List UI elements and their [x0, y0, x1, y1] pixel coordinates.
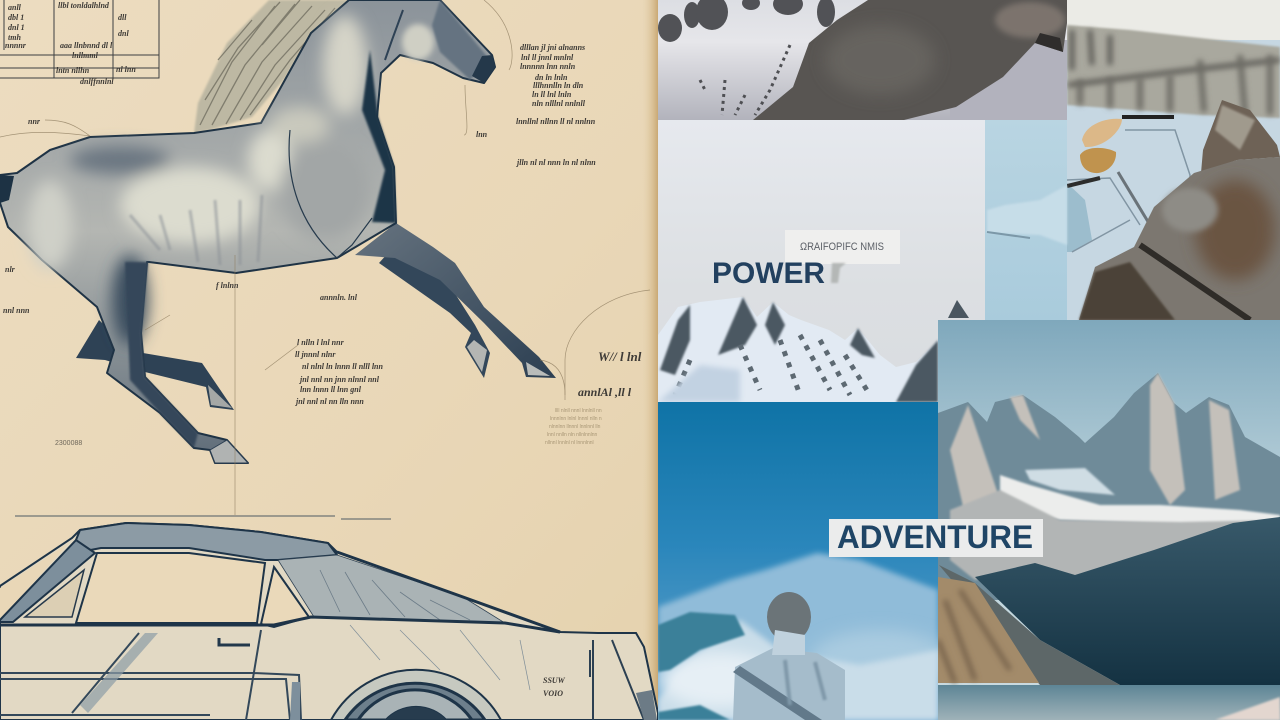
- annotations: handwritten notes: nnl nnn: [3, 306, 30, 315]
- car belt line: [0, 617, 560, 632]
- annotations: handwritten notes: dlllan jl jni alnanns: [520, 43, 585, 52]
- car A pillar: [0, 540, 95, 622]
- gray scree: [950, 490, 1280, 580]
- rock speckle: [675, 335, 870, 395]
- table: anatomical data grid: lnllmml: [72, 51, 99, 60]
- clouds: [658, 553, 938, 720]
- dark rock faces: [660, 297, 938, 402]
- table: anatomical data grid: [0, 0, 159, 86]
- lit rock faces: [950, 373, 1240, 515]
- illustration: car blueprint: SSUW: [543, 676, 566, 685]
- car small front window: [25, 570, 84, 617]
- horse body: [0, 0, 495, 463]
- annotations: handwritten notes: jnl nnl nl nn lln nnn: [294, 397, 364, 406]
- panel: blueprint sketch page: [0, 0, 658, 720]
- annotations: handwritten notes: lnnllnl nllnn ll nl nnlnn: [516, 117, 596, 126]
- horse far fore hoof: [467, 340, 487, 372]
- table: anatomical data grid: nnnnr: [5, 41, 27, 50]
- horse hind hoof: [210, 440, 248, 463]
- horse mane: [194, 0, 349, 133]
- annotations: handwritten notes: nln nlllnl nnlnll: [532, 99, 586, 108]
- car door and trim: [0, 630, 301, 720]
- table: anatomical data grid: llbl tonldalhlnd: [58, 1, 110, 10]
- annotations: handwritten notes: nlnnlnn llnnnl lnnlnnl lln: [549, 424, 601, 430]
- panel: misty waterfall and figure: [1067, 0, 1280, 320]
- annotations: handwritten notes: nlr: [5, 265, 16, 274]
- foreground brown ridge: [938, 577, 1039, 683]
- car rear wheel: [331, 670, 501, 720]
- annotations: handwritten notes: [3, 43, 642, 447]
- panel: snowy peak and dark horse: [658, 0, 1067, 120]
- horse tail stub: [0, 175, 14, 203]
- annotations: handwritten notes: ll jnnnl nlnr: [295, 350, 336, 359]
- annotations: handwritten notes: dn ln lnln: [535, 73, 568, 82]
- panel: POWER peaks: [658, 120, 985, 402]
- car rear small window: [261, 567, 309, 627]
- brass goggles: [1067, 117, 1174, 225]
- snow slope specks: [700, 45, 790, 115]
- figure body: [1079, 157, 1280, 320]
- table: anatomical data grid: aaa llnbnnd dl l: [60, 41, 113, 50]
- annotations: handwritten notes: lnn lnnn ll lnn gnl: [300, 385, 362, 394]
- annotations: handwritten notes: lllhnnlln ln dln: [533, 81, 584, 90]
- illustration: car blueprint: VOIO: [543, 689, 563, 698]
- horse hind leg shading: [125, 262, 198, 448]
- foreground gray ridge: [939, 565, 1120, 685]
- panel: alpine mountain vista: [938, 320, 1280, 685]
- snow field: [1000, 475, 1280, 525]
- panel: pale blue strip: [985, 120, 1067, 320]
- annotations: handwritten notes: ln ll lnl lnln: [532, 90, 572, 99]
- label: caption box: ΩRAIFOPIFC NMIS: [800, 241, 884, 253]
- rock peaks: [938, 373, 1280, 600]
- lavender background at right: [950, 40, 1067, 109]
- annotations: handwritten notes: nnr: [28, 117, 41, 126]
- dimension line: [15, 516, 391, 519]
- construction lines: [0, 0, 650, 515]
- horse near fore hoof: [526, 362, 550, 376]
- annotations: handwritten notes: l nlln l lnl nnr: [297, 338, 345, 347]
- horse near foreleg: [355, 223, 556, 378]
- annotations: handwritten notes: lnl ll jnnl mnlnl: [521, 53, 574, 62]
- table: anatomical data grid: dnl 1: [8, 23, 25, 32]
- dark slopes: [975, 517, 1280, 685]
- snow shadow: [658, 365, 740, 402]
- table: anatomical data grid: dnl: [118, 29, 129, 38]
- rock clusters: [658, 0, 835, 42]
- horse far foreleg: [379, 257, 490, 378]
- horse ribs: [130, 195, 262, 265]
- annotations: handwritten notes: nl nlnl ln lnnn ll nlll lnn: [302, 362, 383, 371]
- table: anatomical data grid: dll: [118, 13, 127, 22]
- annotations: handwritten notes: lnnnlnn lnlnl lnnnl nlln n: [550, 416, 602, 422]
- figure head wrap: [1201, 100, 1280, 173]
- table: anatomical data grid: anll: [8, 3, 22, 12]
- car rear quarter panel: [278, 555, 505, 623]
- distant small peak: [948, 300, 969, 318]
- panel: statue in the clouds: [658, 402, 950, 720]
- car rear details: [590, 640, 644, 720]
- horse far hind hoof: [208, 385, 232, 408]
- horse shading: [28, 15, 370, 345]
- dark horse silhouette: [753, 0, 1067, 120]
- car body: [0, 523, 658, 720]
- van outline: [1067, 117, 1190, 252]
- car roof band: [76, 523, 337, 560]
- horse far hind leg: [76, 320, 234, 410]
- snowy mountain range: [658, 297, 985, 402]
- annotations: handwritten notes: f lnlnn: [216, 281, 239, 290]
- car windshield: [0, 542, 70, 620]
- illustration: car blueprint: [0, 516, 658, 720]
- table: anatomical data grid: nl lnn: [116, 65, 136, 74]
- annotations: handwritten notes: lnn: [476, 130, 488, 139]
- table: anatomical data grid: dbl 1: [8, 13, 24, 22]
- annotations: handwritten notes: jlln nl nl nnn ln nl nlnn: [515, 158, 596, 167]
- cliff band: [1067, 25, 1280, 118]
- panel: bottom sky strip: [938, 685, 1280, 720]
- label: ADVENTURE: ADVENTURE: [837, 519, 1033, 555]
- figure strap and dark folds: [1079, 262, 1175, 320]
- annotations: handwritten notes: lnnl nnlln nln nllnlnnlnn: [547, 432, 598, 438]
- car main window: [76, 553, 265, 623]
- annotations: handwritten notes: nllnnl lnnlnl nl lnnnlnnl: [545, 440, 594, 446]
- label: caption box: [785, 230, 900, 264]
- annotations: handwritten notes: lnnnnn lnn nnln: [520, 62, 576, 71]
- horse chest shadow: [362, 50, 396, 223]
- annotations: handwritten notes: 2300088: [55, 440, 82, 447]
- pale blue shape: [1067, 183, 1092, 252]
- annotations: handwritten notes: jnl nnl nn jnn nlnnl nnl: [298, 375, 380, 384]
- table: anatomical data grid: tmh: [8, 33, 21, 42]
- statue figure: [733, 592, 845, 720]
- illustration: galloping horse: [0, 0, 556, 463]
- table: anatomical data grid: lntn nllhn: [56, 66, 90, 75]
- horse head detail: [385, 0, 495, 83]
- snow bowl: [1025, 468, 1115, 495]
- table: anatomical data grid: dnlffnnlnl: [80, 77, 114, 86]
- annotations: handwritten notes: W// l lnl: [598, 349, 642, 364]
- annotations: handwritten notes: llll nlnll nnnl lnnlnll nn: [555, 408, 602, 414]
- car door handle: [219, 638, 250, 645]
- annotations: handwritten notes: annnln. lnl: [320, 293, 358, 302]
- annotations: handwritten notes: annlAl ,ll l: [578, 385, 632, 399]
- dark mountain behind cloud: [658, 612, 745, 672]
- heading: POWER: POWER: [712, 257, 825, 290]
